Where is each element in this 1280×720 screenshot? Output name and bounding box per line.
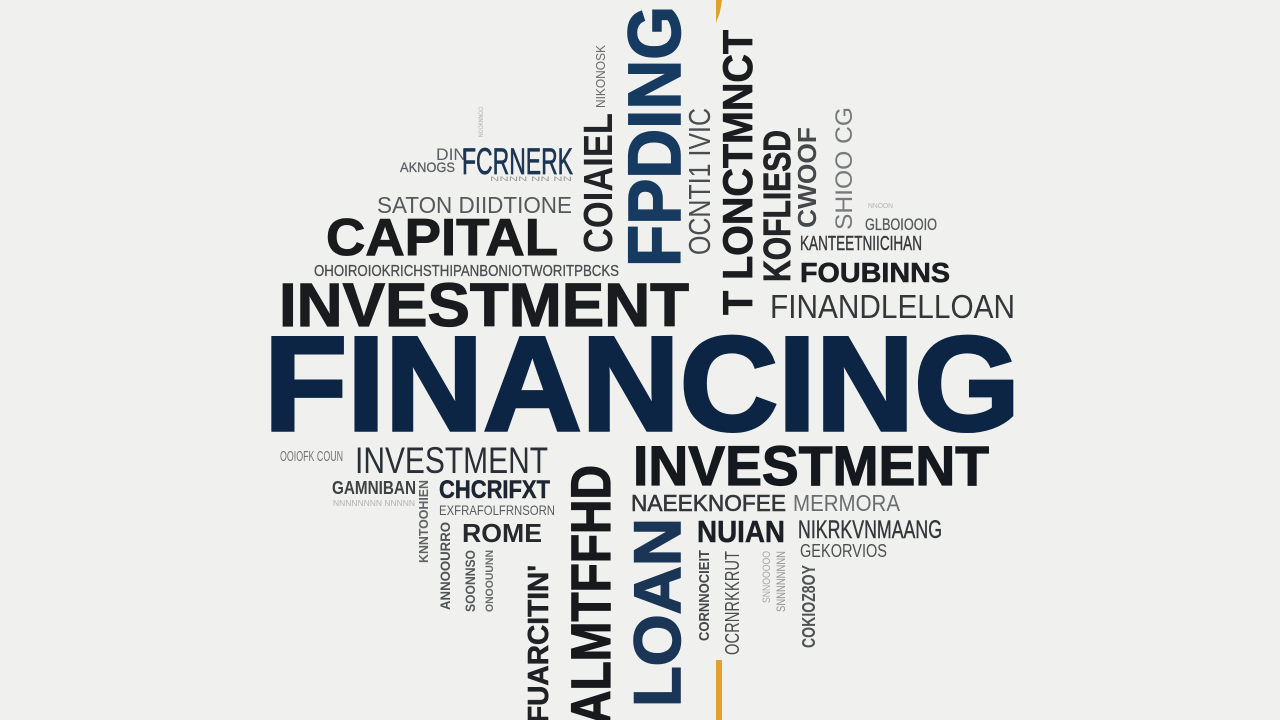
word: OOIOFK COUN: OOIOFK COUN xyxy=(280,448,343,465)
word: FOUBINNS: FOUBINNS xyxy=(800,257,950,288)
word: AKNOGS: AKNOGS xyxy=(400,159,455,175)
lower right word group xyxy=(631,434,989,655)
vertical small word 2: OCRNRKKRUT xyxy=(722,551,744,655)
word: KANTEETNIICIHAN: KANTEETNIICIHAN xyxy=(800,233,922,255)
word: EXFRAFOLFRNSORN: EXFRAFOLFRNSORN xyxy=(439,502,555,518)
vertical small word 3: SOONNSO xyxy=(462,550,478,612)
faint vertical word: NOOKNNOO xyxy=(479,107,485,137)
vertical small word 3: COKIOZ8OY xyxy=(799,565,819,648)
vertical word: OCNTI: OCNTI1 IVIC xyxy=(682,108,717,255)
word: SATON DIIDTIONE: SATON DIIDTIONE xyxy=(377,192,572,218)
vertical word: LOAN: LOAN xyxy=(620,518,694,707)
word: FCRNERK: FCRNERK xyxy=(462,141,573,182)
vertical word: CWOOF: CWOOF xyxy=(792,127,822,228)
word: NUIAN: NUIAN xyxy=(697,514,785,549)
vertical word: TLONCTMNCT: T LONCTMNCT xyxy=(714,30,761,315)
word: NAEEKNOFEE: NAEEKNOFEE xyxy=(631,490,786,516)
word: CAPITAL: CAPITAL xyxy=(326,209,558,267)
small text line: OHOIROIOKRICHSTHIPANBONIOTWORITPBCKS xyxy=(314,263,619,280)
vertical small word 4: ONOOUUNN xyxy=(484,550,496,612)
vertical small word 1: CORNNOCIEIT xyxy=(696,550,713,641)
word: FINANDLELLOAN: FINANDLELLOAN xyxy=(770,288,1015,325)
word: NIKRKVNMAANG: NIKRKVNMAANG xyxy=(798,516,942,544)
accent bar: bottom xyxy=(716,660,722,720)
faint vertical word 2: SNNNNNNNN xyxy=(774,551,788,612)
faint vertical word 1: SNNOOOOO xyxy=(761,551,773,603)
word: INVESTMENT bold lower: INVESTMENT xyxy=(633,434,989,497)
accent bar: top xyxy=(716,0,722,23)
word: DIN: DIN xyxy=(436,145,466,164)
faint caption: NNNNNNNN NNNNN xyxy=(333,499,415,508)
word: GLBOIOOIO: GLBOIOOIO xyxy=(865,215,937,234)
vertical word: FUARCITIN: FUARCITIN' xyxy=(523,565,555,720)
vertical small word 1: KNNTOOHIEN xyxy=(416,480,431,563)
upper left word group xyxy=(279,107,689,339)
main heading: FINANCING: FINANCING xyxy=(264,310,1020,459)
tiny word: NNOON xyxy=(868,203,893,210)
lower left word group xyxy=(280,440,555,612)
vertical word: SHIOO CG: SHIOO CG xyxy=(831,107,858,230)
tiny caption: NNNN NN NN xyxy=(490,177,572,183)
word: ROME: ROME xyxy=(462,518,542,548)
upper centre vertical words xyxy=(575,6,761,315)
word: INVESTMENT upper: INVESTMENT xyxy=(279,271,689,339)
vertical word: COIAIEL: COIAIEL xyxy=(575,113,621,253)
vertical word: ALMTFFHD: ALMTFFHD xyxy=(559,465,622,720)
vertical small word 2: ANNOOURRO xyxy=(437,522,453,610)
word: GAMNIBAN: GAMNIBAN xyxy=(332,478,416,498)
word: CHCRIFXT: CHCRIFXT xyxy=(439,476,550,504)
upper right word group xyxy=(757,107,1015,325)
vertical word: ORFLIESD: KOFLIESD xyxy=(757,130,799,282)
word: INVESTMENT regular: INVESTMENT xyxy=(355,440,548,481)
word: MERMORA: MERMORA xyxy=(793,490,901,516)
tiny vertical word: NIKONOSK xyxy=(593,45,608,108)
word: GEKORVIOS: GEKORVIOS xyxy=(800,541,887,561)
lower centre vertical words xyxy=(523,465,694,720)
